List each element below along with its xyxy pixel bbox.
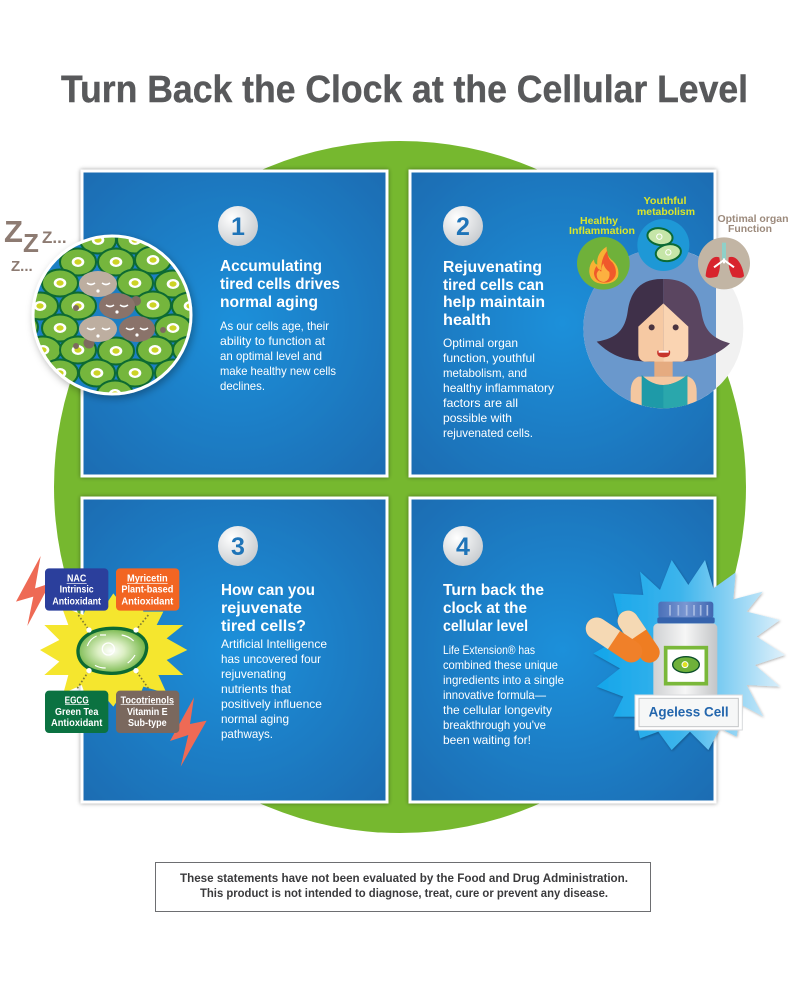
green background circle xyxy=(54,141,746,833)
heading 2 xyxy=(443,259,545,329)
body text 1: an optimal level and xyxy=(220,349,322,363)
yellow starburst xyxy=(40,593,187,707)
body text 2: function, youthful xyxy=(443,351,535,365)
label: Ageless Cell xyxy=(635,695,742,730)
sleeping Z letters: Z... xyxy=(42,228,67,247)
body text 2: possible with xyxy=(443,411,512,425)
label: Ageless Cell: Ageless Cell xyxy=(649,704,729,720)
box: Tocotrienols: Tocotrienols xyxy=(121,695,174,706)
body text 1: make healthy new cells xyxy=(220,364,336,378)
heading 2: health xyxy=(443,312,491,329)
illustration: woman and health circles xyxy=(577,219,750,412)
heading 3: rejuvenate xyxy=(221,600,302,617)
panel: step 1 xyxy=(82,171,387,476)
icon: lightning bolt left xyxy=(16,556,50,626)
box: Myricetin xyxy=(116,568,179,611)
icon: lungs circle xyxy=(698,237,750,289)
body text 1: declines. xyxy=(220,379,265,393)
heading 3 xyxy=(221,582,315,635)
label: youthful metabolism: Youthful xyxy=(644,195,687,207)
body text 3: pathways. xyxy=(221,727,273,741)
body text 3: positively influence xyxy=(221,697,322,711)
panel: step 4 xyxy=(410,498,715,802)
number badge 4 xyxy=(443,526,483,566)
body text 2: healthy inflammatory xyxy=(443,381,554,395)
body text 2: metabolism, and xyxy=(443,366,527,380)
heading 2: tired cells can xyxy=(443,277,544,294)
number badge 3: 3 xyxy=(231,533,245,561)
box: Myricetin: Myricetin xyxy=(127,574,168,585)
heading 3: How can you xyxy=(221,582,315,599)
body text 3: has uncovered four xyxy=(221,652,321,666)
dotted connectors xyxy=(77,615,148,688)
title: Turn Back the Clock at the Cellular Level xyxy=(61,69,748,111)
woman xyxy=(597,279,730,412)
number badge 1: 1 xyxy=(231,213,245,241)
heading 2: Rejuvenating xyxy=(443,259,542,276)
heading 4: cellular level xyxy=(443,618,528,635)
label: optimal organ function xyxy=(718,213,788,235)
label: optimal organ function: Function xyxy=(728,223,772,235)
box: NAC xyxy=(45,568,108,611)
number badge 2: 2 xyxy=(456,213,470,241)
body text 3: nutrients that xyxy=(221,682,292,696)
heading 1: normal aging xyxy=(220,294,318,311)
tired cells xyxy=(79,271,155,342)
heading 4: Turn back the xyxy=(443,582,544,599)
body text 1 xyxy=(220,319,336,393)
panel: step 2 xyxy=(410,171,715,476)
heading 4 xyxy=(443,582,544,635)
sleeping Z letters: Z xyxy=(4,214,23,249)
body text 3: Artificial Intelligence xyxy=(221,637,327,651)
body text 2: Optimal organ xyxy=(443,336,518,350)
box: EGCG: Antioxidant xyxy=(51,718,103,729)
body text 2: factors are all xyxy=(443,396,518,410)
body text 4: breakthrough you've xyxy=(443,718,546,732)
label: youthful metabolism: metabolism xyxy=(637,206,695,218)
bottle xyxy=(653,602,717,698)
box: NAC: NAC xyxy=(67,574,87,585)
illustration: tired cell magnifier xyxy=(29,234,198,402)
label: healthy inflammation: Healthy xyxy=(580,215,618,227)
box: EGCG: Green Tea xyxy=(55,707,99,718)
heading 3: tired cells? xyxy=(221,618,306,635)
label: healthy inflammation: Inflammation xyxy=(569,225,635,237)
backdrop circle xyxy=(583,248,743,408)
disclaimer box: This product is not intended to diagnose, treat, cure or prevent any disease. xyxy=(200,888,608,900)
number badge 3 xyxy=(218,526,258,566)
body text 3 xyxy=(221,637,327,741)
box: NAC: Intrinsic xyxy=(60,585,94,596)
heading 1: Accumulating xyxy=(220,258,322,275)
sleeping Z letters: Z... xyxy=(11,258,33,275)
box: EGCG xyxy=(45,691,108,733)
label: youthful metabolism xyxy=(637,195,695,218)
box: Tocotrienols: Vitamin E xyxy=(127,707,168,718)
capsules xyxy=(582,607,664,667)
box: Myricetin: Plant-based xyxy=(121,585,173,596)
body text 4 xyxy=(443,643,564,747)
body text 4: Life Extension® has xyxy=(443,643,535,657)
number badge 2 xyxy=(443,206,483,246)
heading 4: clock at the xyxy=(443,600,527,617)
blue starburst xyxy=(593,560,785,750)
central cell xyxy=(78,627,147,673)
sleeping Z letters xyxy=(4,214,67,275)
body text 4: ingredients into a single xyxy=(443,673,564,687)
heading 1 xyxy=(220,258,340,311)
heading 1: tired cells drives xyxy=(220,276,340,293)
body text 4: combined these unique xyxy=(443,658,558,672)
box: Tocotrienols: Sub-type xyxy=(128,718,167,729)
body text 3: rejuvenating xyxy=(221,667,286,681)
body text 2: rejuvenated cells. xyxy=(443,426,533,440)
body text 2 xyxy=(443,336,554,440)
box: Tocotrienols xyxy=(116,691,179,733)
body text 1: ability to function at xyxy=(220,334,326,348)
icon: lightning bolt right xyxy=(170,697,207,767)
heading 2: help maintain xyxy=(443,294,545,311)
icon: cells circle xyxy=(637,219,689,271)
illustration: four nutrients diagram xyxy=(16,556,207,767)
box: NAC: Antioxidant xyxy=(52,596,101,607)
label: optimal organ function: Optimal organ xyxy=(718,213,788,225)
disclaimer box: These statements have not been evaluated by the Food and Drug Administration. xyxy=(180,873,628,885)
body text 1: As our cells age, their xyxy=(220,319,329,333)
number badge 4: 4 xyxy=(456,533,470,561)
box: EGCG: EGCG xyxy=(65,695,89,706)
label: healthy inflammation xyxy=(569,215,635,237)
body text 3: normal aging xyxy=(221,712,289,726)
body text 4: innovative formula— xyxy=(443,688,546,702)
sleeping Z letters: Z xyxy=(23,228,39,258)
disclaimer box xyxy=(156,862,650,912)
panel: step 3 xyxy=(82,498,387,802)
box: Myricetin: Antioxidant xyxy=(121,596,174,607)
number badge 1 xyxy=(218,206,258,246)
illustration: Ageless Cell bottle xyxy=(582,560,785,750)
icon: flame circle xyxy=(577,237,630,290)
body text 4: the cellular longevity xyxy=(443,703,552,717)
body text 4: been waiting for! xyxy=(443,733,531,747)
